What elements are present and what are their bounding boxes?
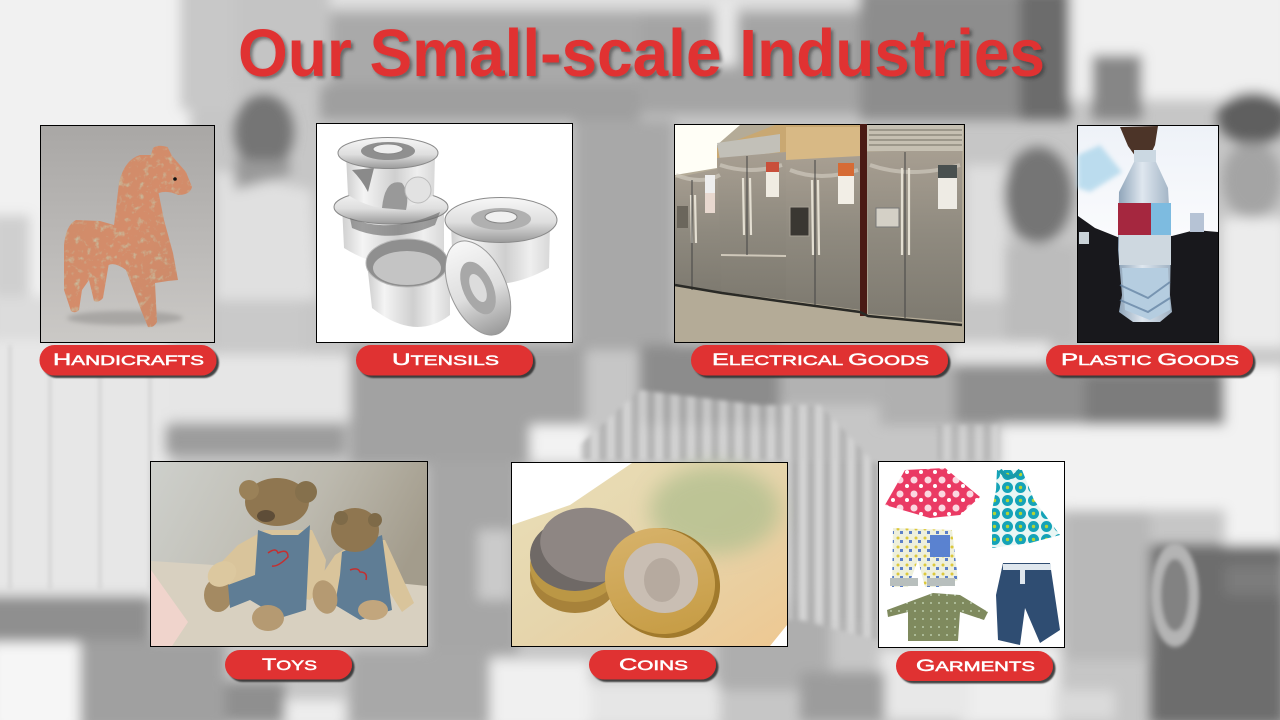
title: Our Small-scale Industries [238, 16, 1045, 91]
panel: toys [150, 462, 428, 680]
label pill: Toys [225, 650, 352, 680]
panel: plastic goods [1046, 126, 1253, 376]
photo: steel pots [316, 124, 572, 345]
label pill: Toys: T OYS [262, 655, 317, 674]
label pill: Garments [896, 651, 1053, 681]
label pill: Coins [589, 650, 716, 680]
photo: teddy bears [150, 462, 428, 646]
panel: garments [878, 462, 1064, 681]
photo: refrigerators [674, 124, 964, 342]
label pill: Garments: G ARMENTS [916, 656, 1035, 675]
photo: children's clothes [878, 462, 1064, 648]
label pill: Plastic Goods [1046, 345, 1253, 376]
label pill: Handicrafts [40, 345, 216, 376]
label pill: Utensils: U TENSILS [392, 350, 499, 369]
label pill: Coins: C OINS [619, 655, 688, 674]
panel: coins [512, 462, 788, 680]
panel: handicrafts [40, 126, 216, 376]
photo: water bottle [1078, 126, 1218, 342]
panel: utensils [316, 124, 572, 376]
label pill: Electrical Goods [691, 345, 948, 376]
label pill: Plastic Goods: P LASTIC G OODS [1061, 350, 1239, 369]
label pill: Utensils [356, 345, 533, 376]
panel: electrical goods [674, 124, 964, 376]
label pill: Electrical Goods: E LECTRICAL G OODS [712, 350, 929, 369]
photo: clay horse [40, 126, 214, 342]
label pill: Handicrafts: H ANDICRAFTS [53, 350, 204, 369]
background: striped shirts [10, 345, 1199, 647]
photo: rupee coins on banknote [512, 462, 788, 659]
